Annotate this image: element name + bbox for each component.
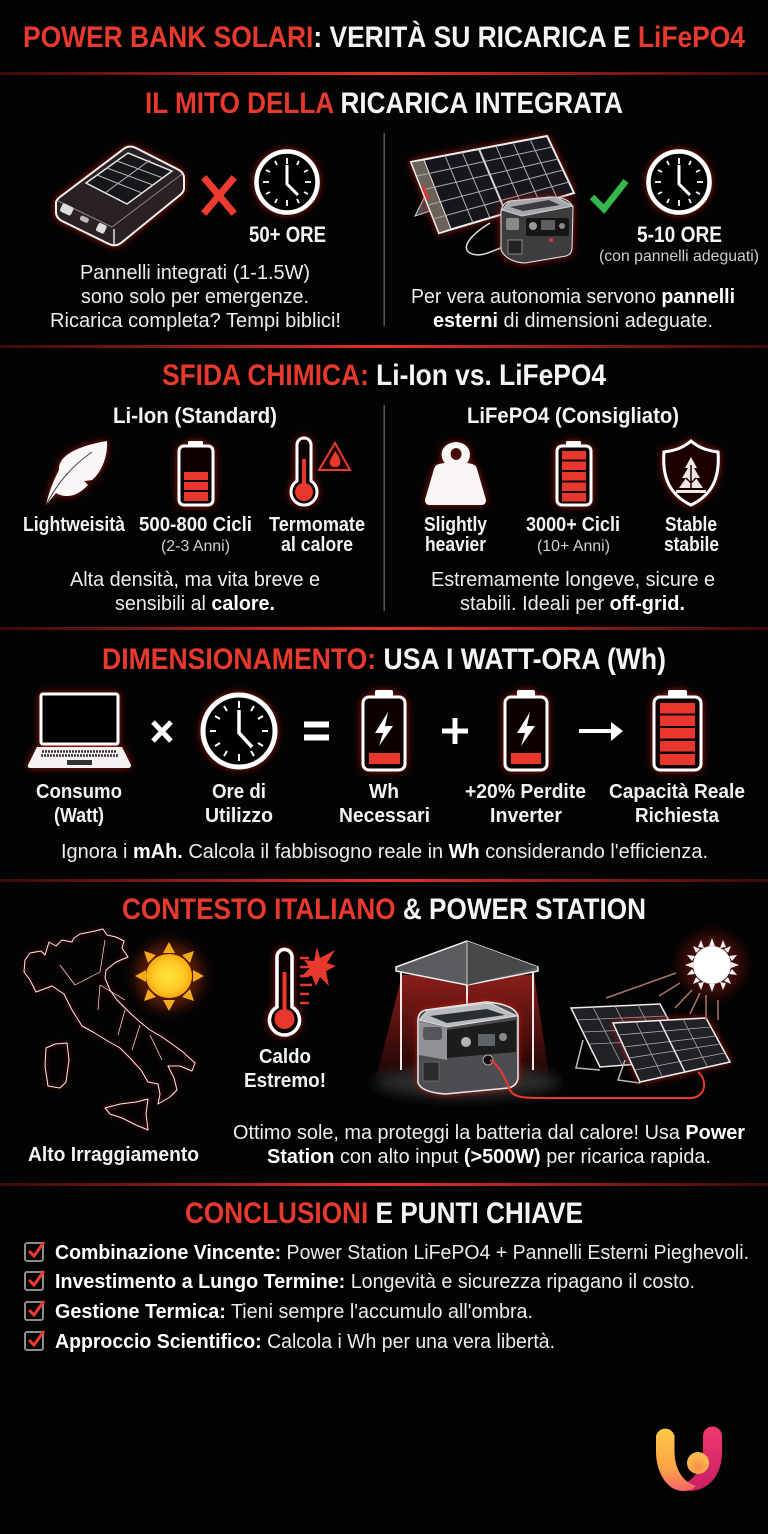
text: lifepo4 summary: Estremamente longeve, sicure e [431, 568, 715, 591]
text: li-ion summary: sensibili al calore. [115, 592, 275, 615]
label: 5-10 ore: (con pannelli adeguati) [599, 248, 759, 265]
label: caldo estremo: Estremo! [244, 1069, 326, 1092]
text: lifepo4 summary [431, 568, 715, 615]
symbol: plus [442, 718, 468, 744]
labels: li-ion features: 500-800 Cicli [139, 513, 252, 536]
labels: formula [36, 780, 745, 827]
labels: formula: Inverter [490, 804, 562, 827]
icon: battery full [654, 690, 701, 770]
labels: lifepo4 features: Slightly [424, 513, 487, 536]
labels: formula: Consumo [36, 780, 122, 803]
icon: clock [648, 152, 710, 212]
labels: li-ion features [23, 513, 365, 556]
icon: clock [203, 695, 275, 767]
labels: lifepo4 features: Stable [665, 513, 717, 536]
text: pannelli integrati: sono solo per emergenze. [81, 285, 309, 308]
checkbox list icons [25, 1242, 44, 1350]
labels: formula: Utilizzo [205, 804, 273, 827]
illustration: gazebo with power station [375, 941, 704, 1098]
icon: thermometer with warning [291, 438, 350, 505]
labels: li-ion features: (2-3 Anni) [161, 538, 230, 555]
label: 50+ ore: 50+ ORE [249, 222, 326, 247]
labels: formula: Richiesta [635, 804, 720, 827]
panel: contesto italiano [24, 893, 745, 1168]
icon: white sun with rays [606, 933, 744, 1020]
panel: sfida chimica [23, 359, 719, 615]
labels: lifepo4 features: stabile [664, 533, 719, 556]
heading: conclusioni: CONCLUSIONI E PUNTI CHIAVE [185, 1197, 583, 1230]
labels: lifepo4 features: (10+ Anni) [537, 538, 610, 555]
panel: conclusioni [25, 1197, 749, 1353]
subheading: lifepo4: LiFePO4 (Consigliato) [467, 403, 679, 428]
icon: laptop [28, 694, 131, 768]
bullet: gestione termica: Gestione Termica: Tieni sempre l'accumulo all'ombra. [55, 1300, 533, 1323]
icon: weight [425, 442, 486, 505]
icon: red cross [206, 180, 232, 211]
heading: sfida chimica: SFIDA CHIMICA: Li-Ion vs. LiFePO4 [162, 359, 606, 392]
icon: power bank with solar panel [56, 146, 184, 245]
labels: formula: Necessari [339, 804, 430, 827]
label: 5-10 ore [599, 222, 759, 265]
labels: lifepo4 features [424, 513, 719, 556]
arrow [579, 722, 623, 741]
labels: formula: (Watt) [54, 804, 104, 827]
icon: map of italy [24, 929, 195, 1130]
labels: formula: Capacità Reale [609, 780, 745, 803]
text: pannelli integrati: Ricarica completa? Tempi biblici! [50, 309, 341, 332]
labels: li-ion features: Lightweisità [23, 513, 126, 536]
heading: contesto italiano: CONTESTO ITALIANO & POWER STATION [122, 893, 646, 926]
icon: yellow sun [135, 942, 204, 1011]
labels: li-ion features: Termomate [269, 513, 365, 536]
icon: battery with bolt 2 [505, 690, 547, 770]
subheading: li-ion: Li-Ion (Standard) [113, 403, 277, 428]
label: caldo estremo: Caldo [259, 1045, 311, 1068]
text: li-ion summary: Alta densità, ma vita breve e [70, 568, 320, 591]
labels: formula: Ore di [212, 780, 266, 803]
text: pannelli esterni: Per vera autonomia servono pannelli [411, 285, 735, 308]
text: note mah: Ignora i mAh. Calcola il fabbisogno reale in Wh considerando l'efficienza. [61, 840, 708, 863]
icon: battery with bolt 1 [363, 690, 405, 770]
icon: battery low [179, 441, 213, 505]
illustration: outdoor solar panels [571, 1004, 730, 1083]
symbol: equals [304, 724, 329, 738]
symbol: times [153, 722, 171, 741]
text: li-ion summary [70, 568, 320, 615]
label: alto irraggiamento: Alto Irraggiamento [28, 1143, 199, 1166]
text: power station advice [233, 1121, 745, 1168]
bullet: combinazione vincente: Combinazione Vincente: Power Station LiFePO4 + Pannelli Esterni Pieghevoli. [55, 1241, 749, 1264]
icon: green check [592, 181, 626, 209]
icon: shield [664, 441, 718, 505]
icon: hot thermometer [270, 947, 336, 1035]
heading: dimensionamento: DIMENSIONAMENTO: USA I WATT-ORA (Wh) [102, 643, 666, 676]
labels: lifepo4 features: heavier [425, 533, 486, 556]
text: pannelli esterni: esterni di dimensioni adeguate. [433, 309, 713, 332]
icon: feather [46, 441, 107, 505]
labels: lifepo4 features: 3000+ Cicli [526, 513, 620, 536]
icon: clock [256, 152, 318, 212]
panel: dimensionamento [28, 643, 745, 863]
text: lifepo4 summary: stabili. Ideali per off-grid. [460, 592, 685, 615]
label: 5-10 ore: 5-10 ORE [637, 222, 722, 247]
labels: li-ion features: al calore [281, 533, 353, 556]
labels: formula: Wh [369, 780, 399, 803]
text: pannelli integrati [50, 261, 341, 332]
panel: il mito della ricarica integrata [50, 87, 759, 332]
text: pannelli integrati: Pannelli integrati (1-1.5W) [80, 261, 310, 284]
label: caldo estremo [244, 1045, 326, 1092]
text: pannelli esterni [411, 285, 735, 332]
bullet: investimento: Investimento a Lungo Termine: Longevità e sicurezza ripagano il costo. [55, 1270, 695, 1293]
text: power station advice: Station con alto input (>500W) per ricarica rapida. [267, 1145, 711, 1168]
title: POWER BANK SOLARI: VERITÀ SU RICARICA E LiFePO4 [23, 20, 745, 54]
bullet: approccio scientifico: Approccio Scientifico: Calcola i Wh per una vera libertà. [55, 1330, 555, 1353]
text: power station advice: Ottimo sole, ma proteggi la batteria dal calore! Usa Power [233, 1121, 745, 1144]
labels: formula: +20% Perdite [465, 780, 586, 803]
icon: battery full [557, 441, 591, 505]
logo [656, 1426, 722, 1491]
heading: il mito: IL MITO DELLA RICARICA INTEGRATA [145, 87, 623, 120]
icon: folding solar panel and power station [411, 136, 574, 263]
